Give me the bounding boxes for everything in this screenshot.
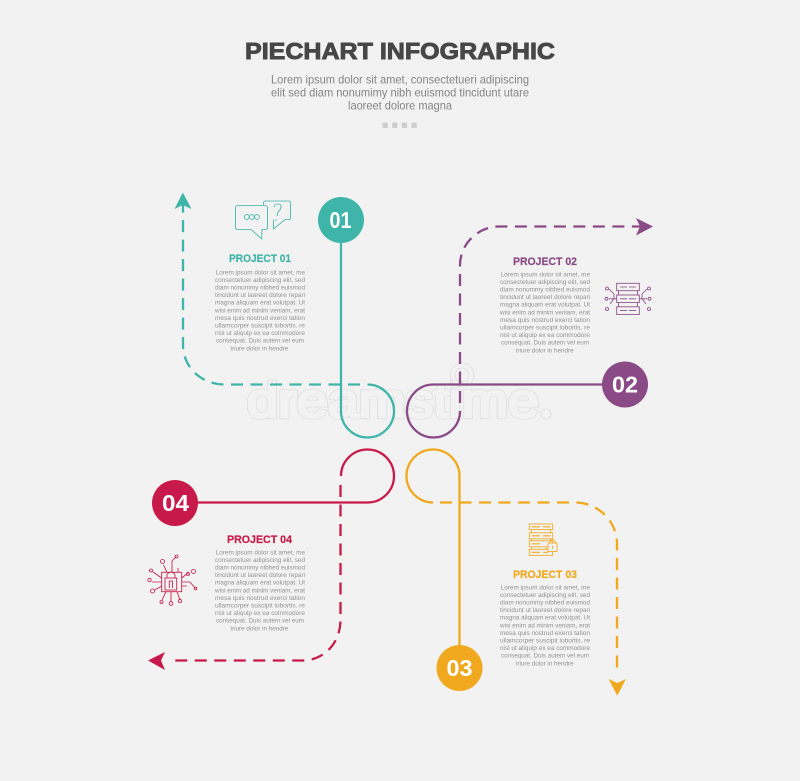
body text: project 01 <box>214 269 306 352</box>
body text: project 04: tincidunt ut laoreet dolore repari <box>215 572 305 579</box>
watermark: dreamstime <box>247 375 539 428</box>
icon: circuit lock <box>148 555 197 605</box>
body text: project 04: wisi enim ad minim veniam, erat <box>214 587 305 594</box>
number badge 01 <box>318 197 364 243</box>
yellow arrowhead <box>608 679 626 696</box>
body text: project 02: nisl ut aliquip ex ea commodore <box>500 332 590 339</box>
number badge 03 <box>436 645 482 691</box>
body text: project 01: ullamcorper suscipit lobortis. re <box>215 322 306 330</box>
body text: project 04: nisl ut aliquip ex ea commodore <box>215 610 305 617</box>
body text: project 04: ullamcorper suscipit lobortis. re <box>215 602 306 610</box>
body text: project 01: consequat. Duis autem vel eum <box>216 338 304 345</box>
icon: chat bubbles <box>236 201 290 239</box>
title dots <box>382 123 417 128</box>
body text: project 02 <box>499 271 591 354</box>
body text: project 03: wisi enim ad minim veniam, erat <box>499 622 590 629</box>
red solid loop <box>175 450 394 502</box>
body text: project 03: iriure dolor in hendre <box>516 660 574 667</box>
body text: project 01: Lorem ipsum dolor sit amet, me <box>216 269 306 276</box>
number badge 03: 03 <box>446 655 472 681</box>
body text: project 04: diam nonummy nibhed euismod <box>215 564 305 572</box>
body text: project 04: iriure dolor in hendre <box>231 625 289 632</box>
body text: project 04: mesa quis nostrud exerci tation <box>215 595 306 602</box>
body text: project 01: iriure dolor in hendre <box>231 345 289 352</box>
body text: project 02: Lorem ipsum dolor sit amet, me <box>501 271 591 278</box>
purple solid loop <box>407 384 625 438</box>
icon: server network <box>605 283 651 314</box>
body text: project 03: mesa quis nostrud exerci tation <box>500 630 591 637</box>
title: PIECHART INFOGRAPHIC <box>245 38 555 64</box>
panel: project 03 <box>406 450 626 696</box>
body text: project 02: consequat. Duis autem vel eum <box>501 340 589 347</box>
panel: project 02 <box>407 218 653 438</box>
watermark <box>247 363 551 428</box>
body text: project 01: diam nonummy nibhed euismod <box>215 284 305 292</box>
body text: project 02: mesa quis nostrud exerci tation <box>500 317 591 324</box>
body text: project 04: Lorem ipsum dolor sit amet, me <box>216 549 306 556</box>
red dashed arrow path <box>172 485 340 660</box>
body text: project 02: magna aliquam erat volutpat. Ut <box>500 302 590 309</box>
heading: project 02: PROJECT 02 <box>513 256 577 268</box>
body text: project 02: tincidunt ut laoreet dolore repari <box>500 294 590 301</box>
body text: project 03 <box>499 584 591 667</box>
body text: project 02: wisi enim ad minim veniam, erat <box>499 309 590 316</box>
number badge 04 <box>152 480 198 526</box>
body text: project 03: ullamcorper suscipit lobortis. re <box>500 638 591 644</box>
body text: project 01: nisl ut aliquip ex ea commodore <box>215 330 305 337</box>
purple dashed arrow path <box>460 226 640 403</box>
watermark: dreamstime <box>247 375 539 428</box>
heading: project 01: PROJECT 01 <box>229 253 291 265</box>
panel: project 01 <box>174 192 394 438</box>
body text: project 01: wisi enim ad minim veniam, erat <box>214 307 305 314</box>
subtitle <box>271 72 529 112</box>
body text: project 03: diam nonummy nibhed euismod <box>500 600 590 606</box>
body text: project 03: tincidunt ut laoreet dolore repari <box>500 607 590 614</box>
purple arrowhead <box>636 218 653 236</box>
subtitle: laoreet dolore magna <box>348 98 452 112</box>
body text: project 04: consectetuer adipiscing elit, sed <box>215 557 305 564</box>
body text: project 04: consequat. Duis autem vel eum <box>216 618 304 625</box>
number badge 02 <box>602 362 648 408</box>
subtitle: elit sed diam nonumimy nibh euismod tincidunt utare <box>271 86 529 100</box>
body text: project 03: magna aliquam erat volutpat. Ut <box>500 615 590 622</box>
body text: project 01: magna aliquam erat volutpat. Ut <box>215 300 305 307</box>
icon: server with lock <box>529 524 557 555</box>
subtitle: Lorem ipsum dolor sit amet, consectetueri adipiscing <box>271 72 529 86</box>
heading: project 04: PROJECT 04 <box>227 534 293 546</box>
number badge 04: 04 <box>162 490 189 516</box>
panel: project 04 <box>148 450 394 670</box>
body text: project 01: tincidunt ut laoreet dolore repari <box>215 292 305 299</box>
body text: project 02: diam nonummy nibhed euismod <box>500 286 590 294</box>
red arrowhead <box>148 652 165 670</box>
body text: project 02: ullamcorper suscipit lobortis. re <box>500 324 591 332</box>
teal solid loop <box>341 220 394 438</box>
body text: project 01: mesa quis nostrud exerci tation <box>215 315 306 322</box>
body text: project 03: Lorem ipsum dolor sit amet, me <box>501 584 591 591</box>
number badge 01: 01 <box>330 207 352 233</box>
body text: project 03: consectetuer adipiscing elit, sed <box>500 592 590 599</box>
body text: project 02: consectetuer adipiscing elit, sed <box>500 279 590 286</box>
teal arrowhead <box>174 192 192 209</box>
body text: project 02: iriure dolor in hendre <box>516 347 574 354</box>
teal dashed arrow path <box>183 204 360 384</box>
heading: project 03: PROJECT 03 <box>513 569 577 581</box>
body text: project 04: magna aliquam erat volutpat. Ut <box>215 580 305 587</box>
yellow dashed arrow path <box>440 502 617 672</box>
number badge 02: 02 <box>612 372 638 398</box>
body text: project 04 <box>214 549 306 632</box>
body text: project 03: nisl ut aliquip ex ea commodore <box>500 645 590 652</box>
yellow solid loop <box>406 450 460 668</box>
body text: project 03: consequat. Duis autem vel eum <box>501 653 589 660</box>
body text: project 01: consectetuer adipiscing elit, sed <box>215 277 305 284</box>
